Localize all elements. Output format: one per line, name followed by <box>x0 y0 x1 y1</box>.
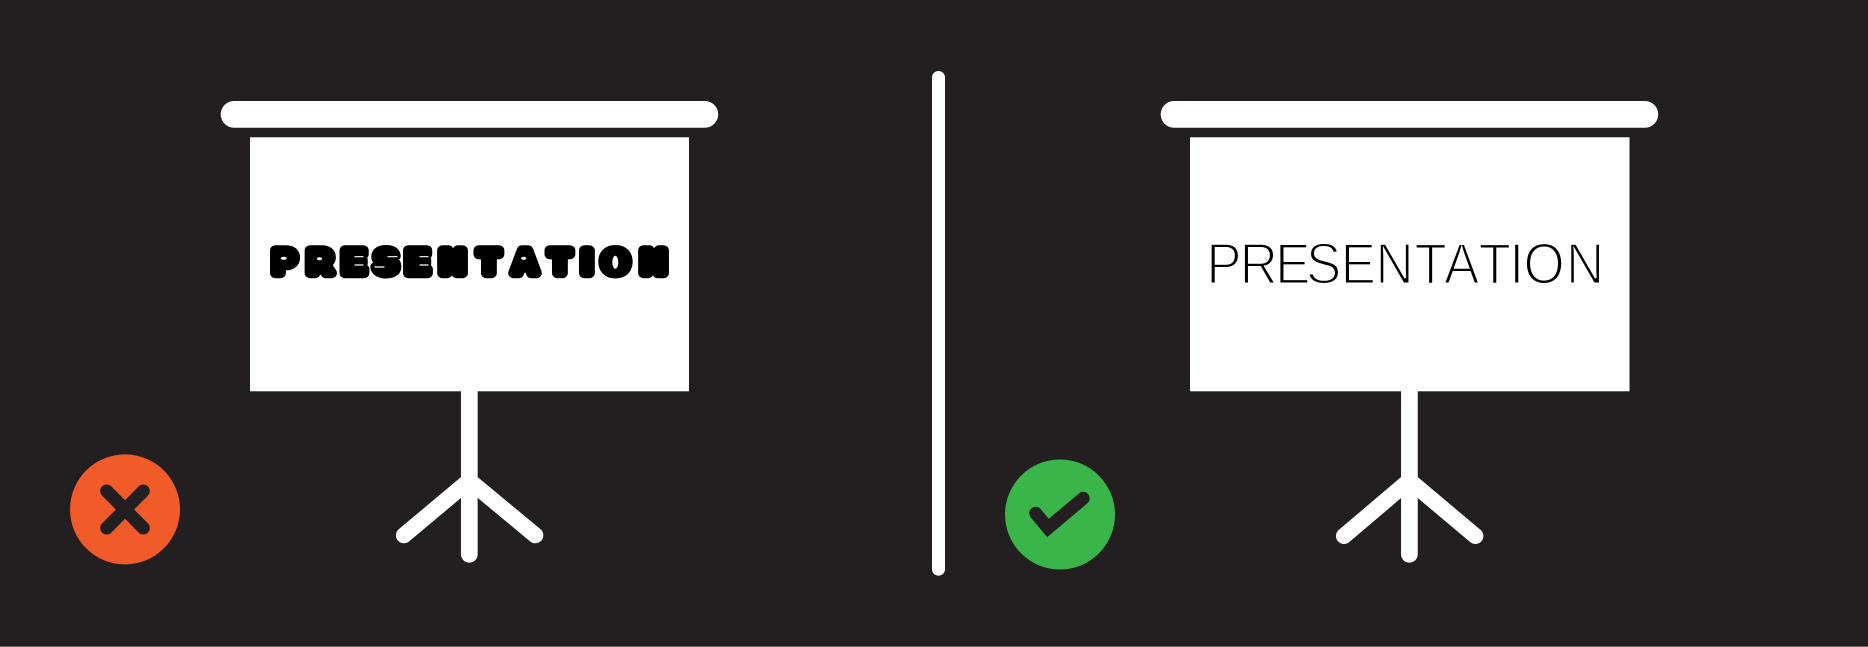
bubble letter counters and slits <box>281 256 618 269</box>
divider <box>932 71 945 576</box>
tripod stand <box>1344 385 1475 554</box>
bubble style word: PRESENTATION <box>273 244 666 280</box>
screen surface <box>250 137 689 391</box>
icon: orange cross badge <box>70 454 180 564</box>
thin clean word: PRESENTATION <box>1206 231 1604 296</box>
panel: bad example projector screen <box>221 101 718 554</box>
panel: good example projector screen <box>1161 101 1658 554</box>
screen top bar <box>221 101 718 128</box>
screen surface <box>1190 137 1630 391</box>
tripod stand <box>404 385 535 554</box>
screen top bar <box>1161 101 1658 128</box>
icon: green check badge <box>1005 460 1115 570</box>
